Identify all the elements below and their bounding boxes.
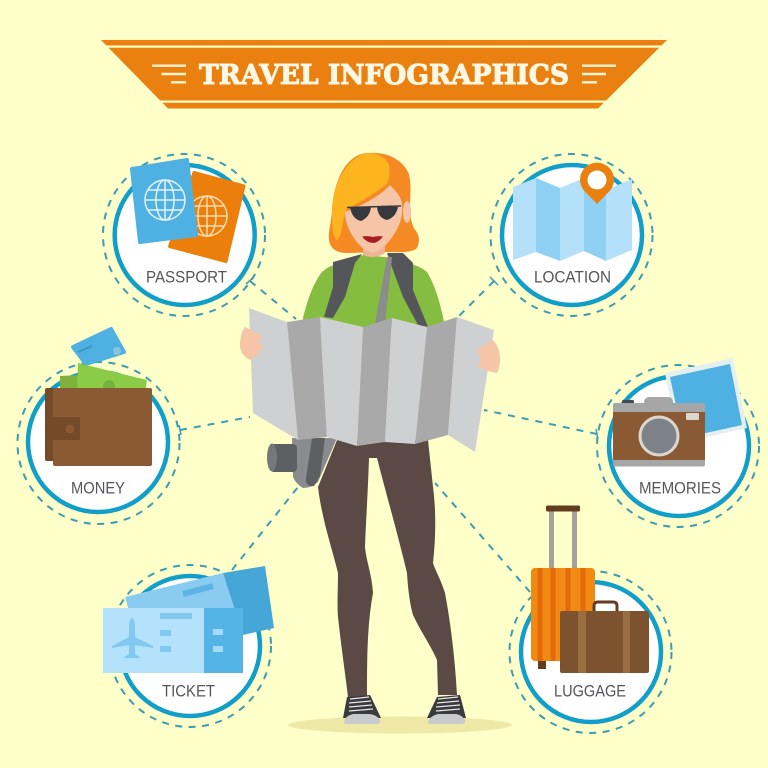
hair back — [329, 153, 419, 253]
label: money: MONEY — [71, 480, 125, 498]
icon: location pin — [580, 163, 614, 204]
ear — [403, 201, 411, 223]
traveller figure — [240, 153, 500, 724]
backpack straps — [324, 253, 428, 327]
folded map — [249, 308, 494, 452]
panel: ticket — [103, 565, 274, 727]
panel: passport — [103, 154, 265, 316]
panel: location — [490, 154, 652, 316]
icon: orange passport — [170, 172, 244, 262]
face — [345, 185, 402, 253]
sunglasses — [347, 206, 401, 221]
icon: credit card — [73, 329, 124, 364]
neck — [363, 245, 385, 257]
icon: photo print — [665, 358, 747, 443]
icon: blue passport — [132, 160, 196, 242]
label: location: LOCATION — [534, 268, 611, 286]
icon: camera — [613, 397, 705, 466]
ground shadow — [288, 716, 512, 734]
connector lines — [179, 277, 598, 592]
title banner — [100, 40, 670, 108]
icon: wallet — [45, 388, 152, 466]
panel: luggage — [510, 506, 672, 733]
panel: memories — [597, 358, 759, 527]
icon: back ticket — [125, 566, 274, 650]
left shoe — [343, 695, 381, 724]
icon: banknotes — [60, 363, 147, 394]
title text: TRAVEL INFOGRAPHICS — [199, 59, 569, 91]
icon: brown briefcase — [560, 602, 649, 673]
legs — [318, 440, 457, 697]
label: memories: MEMORIES — [639, 480, 721, 498]
icon: airplane — [112, 618, 153, 658]
hand: right — [477, 340, 500, 373]
label: passport: PASSPORT — [146, 268, 227, 286]
hip camera — [267, 438, 337, 488]
panel: money — [18, 329, 180, 524]
camera strap — [375, 257, 392, 324]
icon: folded map — [513, 178, 632, 261]
right shoe — [427, 695, 466, 724]
icon: front ticket — [103, 608, 243, 673]
lips — [362, 236, 383, 243]
label: ticket: TICKET — [162, 682, 215, 700]
label: luggage: LUGGAGE — [554, 682, 626, 700]
torso — [303, 255, 445, 327]
icon: orange suitcase — [531, 506, 595, 669]
hair fringe — [332, 153, 389, 241]
hand: left — [240, 327, 263, 360]
